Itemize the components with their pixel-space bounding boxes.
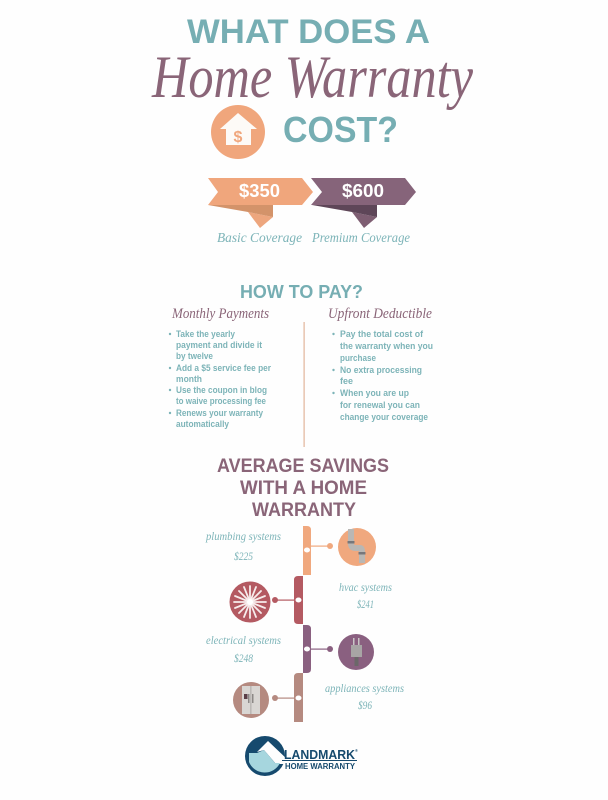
timeline item: appliances: appliances systems bbox=[325, 681, 404, 695]
panel: monthly payments: by twelve bbox=[176, 351, 213, 362]
panel: monthly payments bbox=[169, 306, 271, 430]
timeline item: appliances bbox=[233, 673, 404, 722]
timeline item: plumbing: plumbing systems bbox=[205, 529, 281, 543]
timeline item: electrical: electrical systems bbox=[206, 633, 281, 647]
timeline item: electrical: $248 bbox=[234, 651, 253, 665]
panel: upfront deductible: for renewal you can bbox=[340, 400, 420, 411]
panel: monthly payments: Add a $5 service fee per bbox=[176, 363, 271, 374]
price ribbon: basic coverage: $350 bbox=[239, 181, 280, 201]
panel: monthly payments: to waive processing fee bbox=[176, 396, 266, 407]
panel: monthly payments: Renews your warranty bbox=[176, 408, 264, 419]
panel: upfront deductible: When you are up bbox=[340, 388, 409, 399]
icon: house with dollar sign: $ bbox=[234, 129, 243, 146]
panel: upfront deductible: No extra processing bbox=[340, 365, 422, 376]
divider line bbox=[304, 322, 305, 447]
price ribbon: premium coverage bbox=[311, 178, 416, 228]
timeline item: appliances: $96 bbox=[358, 698, 372, 712]
panel: upfront deductible: the warranty when you bbox=[340, 341, 433, 352]
panel: monthly payments: Use the coupon in blog bbox=[176, 385, 267, 396]
heading: average savings bbox=[217, 456, 389, 521]
panel: upfront deductible bbox=[328, 306, 433, 423]
label: basic coverage: Basic Coverage bbox=[217, 231, 302, 246]
panel: upfront deductible: Upfront Deductible bbox=[328, 306, 432, 322]
title bbox=[151, 13, 473, 150]
logo: landmark home warranty: LANDMARK bbox=[284, 747, 356, 762]
panel: monthly payments: automatically bbox=[176, 419, 230, 430]
panel: upfront deductible: fee bbox=[340, 376, 353, 387]
timeline item: plumbing bbox=[205, 526, 376, 575]
title: COST? bbox=[283, 109, 398, 150]
panel: monthly payments: month bbox=[176, 374, 202, 385]
panel: upfront deductible: Pay the total cost of bbox=[340, 329, 424, 340]
timeline item: hvac: hvac systems bbox=[339, 580, 392, 594]
heading: average savings: WITH A HOME bbox=[240, 478, 367, 499]
panel: monthly payments: Take the yearly bbox=[176, 329, 236, 340]
timeline item: hvac bbox=[230, 576, 392, 624]
price ribbon: basic coverage bbox=[208, 178, 313, 228]
heading: average savings: WARRANTY bbox=[252, 500, 356, 521]
timeline item: hvac: $241 bbox=[357, 597, 374, 611]
label: premium coverage: Premium Coverage bbox=[311, 231, 410, 246]
icon: house with dollar sign bbox=[211, 105, 265, 159]
heading: how to pay: HOW TO PAY? bbox=[240, 282, 363, 302]
logo: landmark home warranty bbox=[245, 736, 358, 776]
logo: landmark home warranty: HOME WARRANTY bbox=[285, 762, 356, 771]
icon: pipe bbox=[338, 528, 376, 566]
timeline item: plumbing: $225 bbox=[234, 549, 253, 563]
panel: monthly payments: Monthly Payments bbox=[171, 306, 269, 322]
panel: monthly payments: payment and divide it bbox=[176, 340, 263, 351]
timeline item: electrical bbox=[206, 625, 374, 673]
price ribbon: premium coverage: $600 bbox=[342, 181, 384, 201]
panel: upfront deductible: change your coverage bbox=[340, 412, 428, 423]
title: WHAT DOES A bbox=[187, 13, 430, 51]
logo: landmark home warranty: ® bbox=[355, 748, 358, 753]
icon: plug bbox=[338, 634, 374, 670]
heading: average savings: AVERAGE SAVINGS bbox=[217, 456, 389, 477]
icon: refrigerator bbox=[233, 682, 269, 718]
title: Home Warranty bbox=[151, 44, 473, 110]
panel: upfront deductible: purchase bbox=[340, 353, 376, 364]
icon: snowflake bbox=[230, 582, 270, 622]
